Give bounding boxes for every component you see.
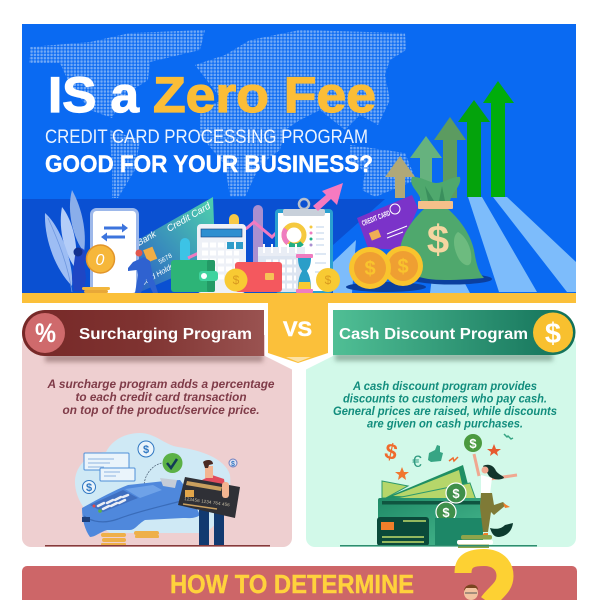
floating icons [383,434,513,480]
surcharge description [46,379,275,417]
title [45,67,376,178]
icon: calendar [258,244,305,292]
icon: large bank card: Credit Card [165,200,213,235]
title: GOOD FOR YOUR BUSINESS? [45,151,373,178]
dollar tokens: $ [86,482,92,494]
icon: gold coin with woman: 0 [96,252,105,269]
wallet [378,498,483,545]
icon: large bank card: 5678 [158,252,174,266]
illustration: wallet and woman [340,434,537,548]
cash discount heading pill [333,310,576,355]
receipts [84,453,135,481]
cash discount description [333,381,557,430]
coin tokens: $ [442,505,450,520]
icon: hourglass [296,254,313,293]
dark card [377,517,429,546]
cash discount heading pill: Cash Discount Program [339,326,528,343]
dollar tokens: $ [231,461,235,468]
coins [101,531,159,546]
dollar tokens [82,441,237,494]
icon: clipboard with chart [275,199,333,293]
check badge [162,453,182,473]
title: Zero Fee [153,67,376,123]
icon: percent: % [35,318,56,348]
icon: large bank card: Card Holder [138,259,178,288]
surcharging heading pill: Surcharging Program [79,326,252,343]
panel: surcharging program [22,310,292,547]
icon: gold coins [346,246,426,292]
terminal body [82,480,200,537]
surcharge description: A surcharge program adds a percentage [46,379,275,391]
icon: man with glasses [464,584,478,600]
floating icons: € [412,452,422,471]
footer panel: how to determine [22,558,577,600]
icon: gold coins: $ [364,258,376,280]
title: IS a [48,67,140,123]
icon: pink arrow [313,183,343,211]
icon: gold coin with woman [72,245,114,293]
pill shadow [335,353,553,361]
panel: cash discount program [306,310,576,548]
icon: large bank card: Bank [135,229,158,248]
floating icons: $ [383,438,400,465]
growth arrows [385,81,514,200]
cash discount description: A cash discount program provides [352,381,537,393]
icon: yellow coin: $ [233,273,240,287]
VS badge [265,300,333,373]
coin tokens: $ [469,436,477,451]
icon: large bank card [135,197,216,292]
pill shadow [45,354,263,362]
icon: yellow coin small: $ [325,273,332,287]
icon: yellow coin small [316,268,340,292]
icon: pills and bars [180,205,278,275]
woman [474,454,517,538]
darker lower strip [22,199,385,293]
world map dots [29,30,416,198]
icon: red wallet [235,262,282,292]
icon: gold coins: $ [397,256,409,278]
icon: purple credit card [357,195,418,250]
hero banner [22,24,576,294]
icon: plant leaves [45,190,85,292]
icon: purple credit card: CREDIT CARD [360,208,392,228]
surcharge description: to each credit card transaction [76,392,246,404]
man with card [178,460,240,545]
floor rays [333,197,576,293]
VS badge: VS [283,318,312,341]
icon: calculator [197,224,246,293]
dollar tokens: $ [143,444,149,456]
man with card: 123456 1234 764 456 [184,496,231,507]
illustration: card terminal [45,433,270,546]
icon: money bag: $ [427,218,449,262]
icon: dollar: $ [545,318,561,350]
cash discount description: General prices are raised, while discounts [333,406,557,418]
icon: phone [92,210,138,294]
coin tokens [436,434,482,522]
footer heading: HOW TO DETERMINE [170,569,414,599]
icon: man pushing [128,250,158,293]
book stack [457,535,493,548]
icon: percent [25,313,65,353]
cash notes [382,481,408,498]
coin tokens: $ [452,486,460,501]
icon: money bag [400,177,492,284]
icon: big question mark [463,558,505,600]
cash discount description: are given on cash purchases. [367,418,523,430]
yellow band [22,293,576,303]
cash discount description: discounts to customers who pay cash. [343,394,547,406]
icon: green wallet [171,260,218,292]
icon: dollar [533,312,573,352]
surcharge description: on top of the product/service price. [62,405,260,417]
icon: yellow coin [224,268,248,292]
surcharging heading pill [22,310,264,356]
title: CREDIT CARD PROCESSING PROGRAM [45,126,368,148]
